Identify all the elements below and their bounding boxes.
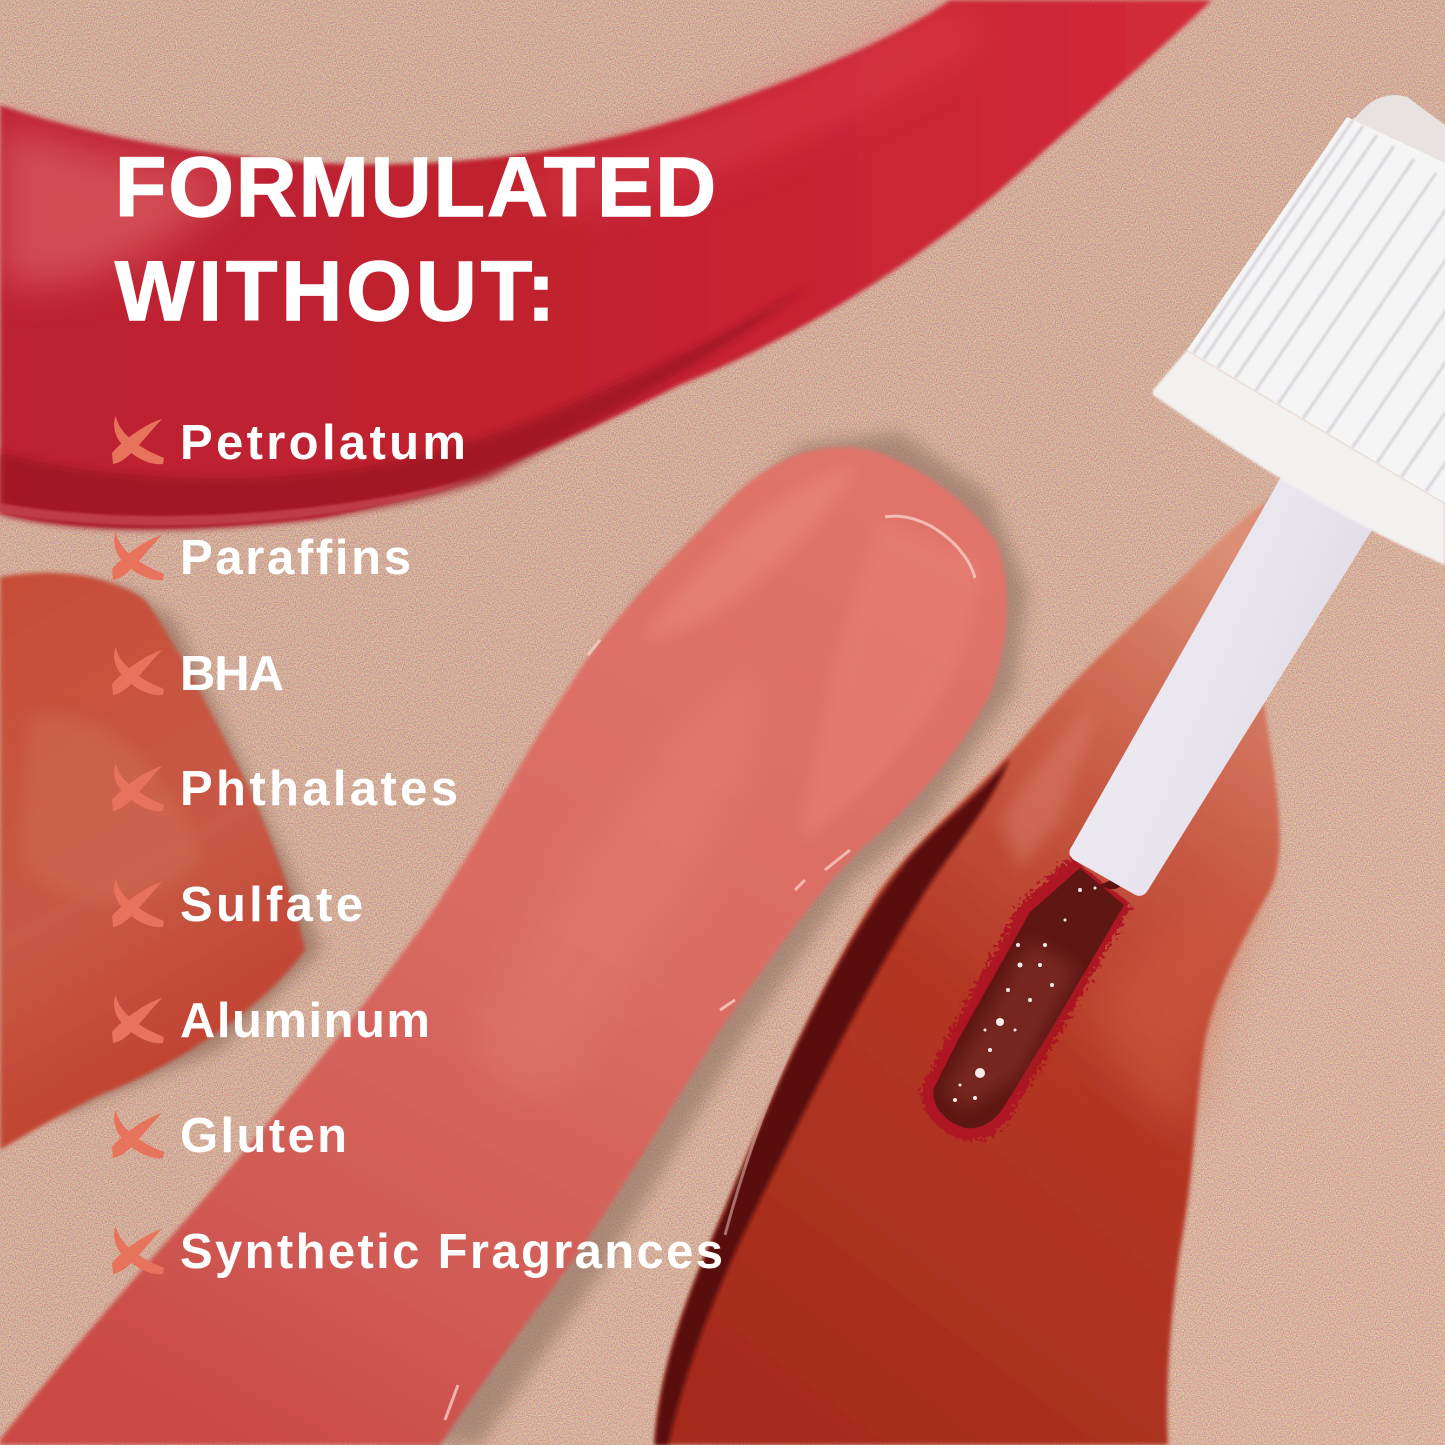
dropper cap xyxy=(1153,95,1445,565)
list: excluded ingredients xyxy=(112,416,723,1279)
item: Petrolatum: Petrolatum xyxy=(180,416,466,470)
applicator brush tip xyxy=(921,857,1132,1140)
title xyxy=(115,140,716,338)
item: Gluten: Gluten xyxy=(180,1109,347,1163)
item: Aluminum: Aluminum xyxy=(180,994,430,1048)
item: BHA xyxy=(112,647,284,701)
item: Phthalates: Phthalates xyxy=(180,762,458,816)
icon: lip gloss applicator xyxy=(921,95,1445,1140)
item: BHA: BHA xyxy=(180,647,284,701)
title: FORMULATED xyxy=(115,140,716,234)
item: Sulfate: Sulfate xyxy=(180,878,363,932)
lip product swatch: deep red smear xyxy=(655,490,1285,1445)
item: Paraffins: Paraffins xyxy=(180,531,411,585)
item: Synthetic Fragrances: Synthetic Fragrances xyxy=(180,1225,723,1279)
lip product swatch: top red swoosh xyxy=(0,0,1212,529)
lip product swatch: left coral smear xyxy=(0,573,322,1150)
applicator white stem xyxy=(1069,470,1372,896)
lip product swatch: pink smear xyxy=(0,432,1028,1445)
title: WITHOUT: xyxy=(115,244,555,338)
